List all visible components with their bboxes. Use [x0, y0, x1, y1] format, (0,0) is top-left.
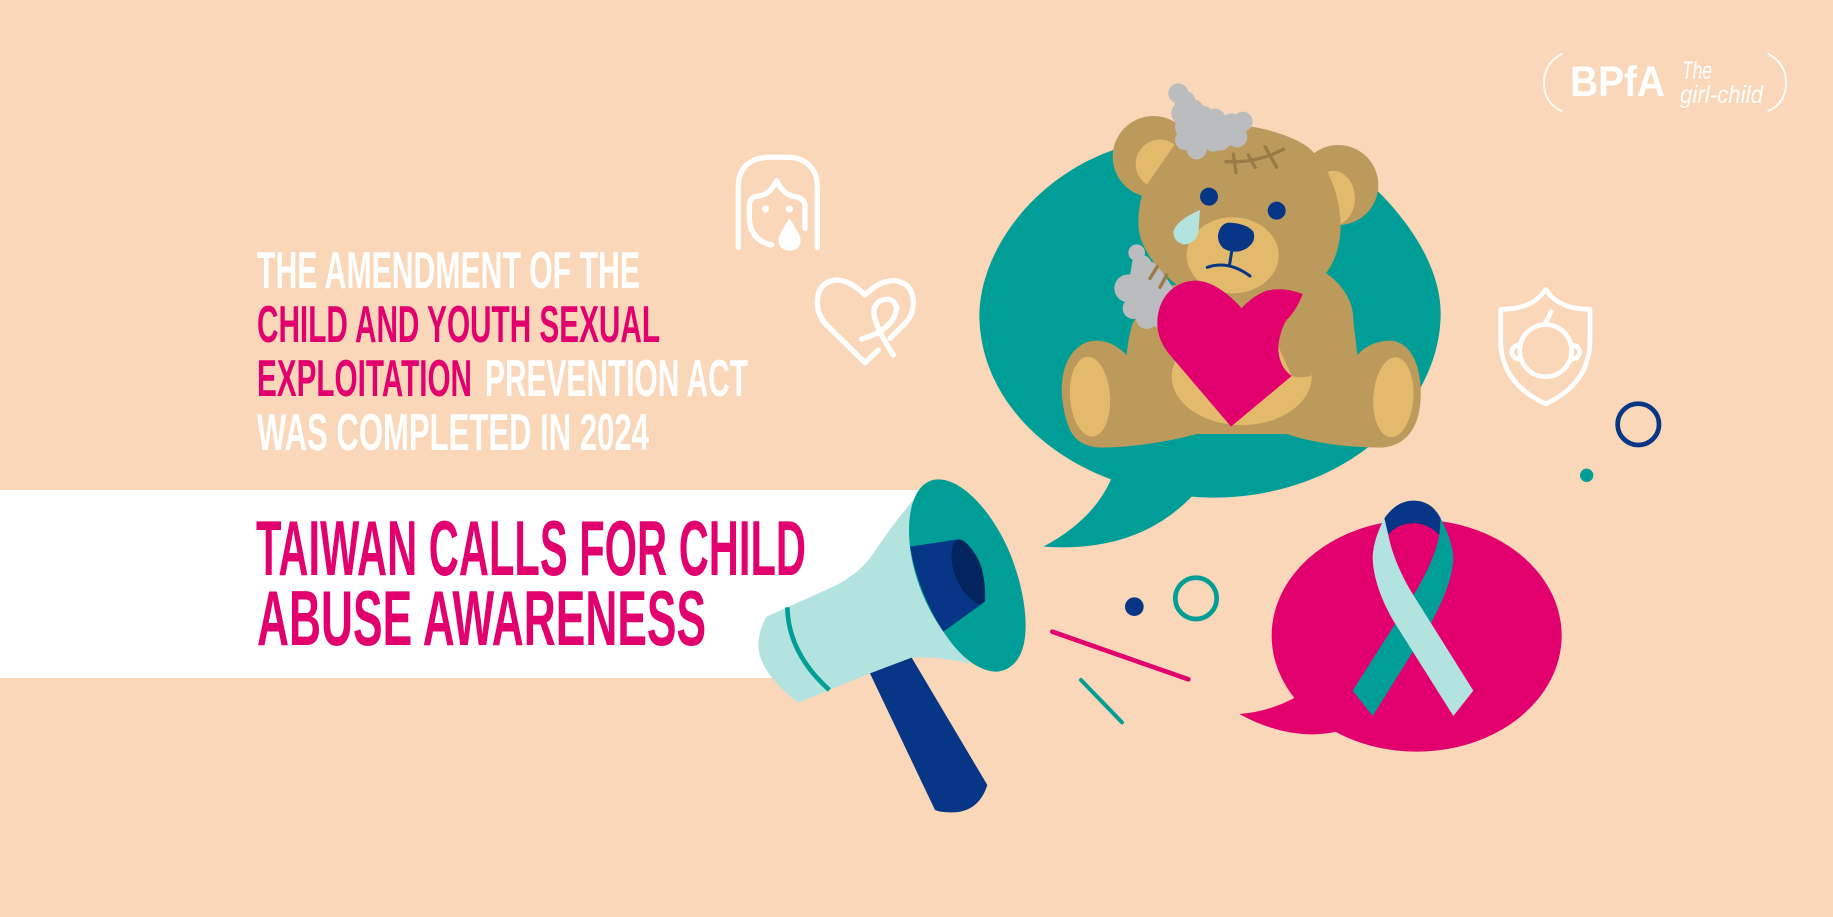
logo: BPfA The girl-child: girl-child: [1680, 81, 1764, 109]
logo: BPfA The girl-child: The: [1682, 57, 1712, 85]
icon: heart with ribbon: [817, 280, 913, 363]
main title: ABUSE AWARENESS: [257, 574, 706, 662]
logo: BPfA The girl-child: BPfA: [1570, 58, 1665, 106]
speech bubble: teal with teddy bear: [979, 83, 1441, 547]
intro text block: [257, 242, 748, 462]
main title: TAIWAN CALLS FOR CHILD: [256, 504, 806, 592]
decorative navy ring and teal dot: [1580, 404, 1659, 482]
heart held by bear: [1157, 281, 1303, 427]
intro text block: PREVENTION ACT: [485, 350, 748, 408]
sound lines and dots: [1052, 578, 1217, 722]
intro text block: THE AMENDMENT OF THE: [257, 242, 640, 300]
speech bubble: pink with awareness ribbon: [1239, 501, 1562, 752]
intro text block: CHILD AND YOUTH SEXUAL: [257, 296, 660, 354]
intro text block: WAS COMPLETED IN 2024: [257, 404, 649, 462]
megaphone: [758, 479, 1026, 812]
head patch and stitches: [1168, 83, 1283, 173]
bubble shape: [979, 146, 1441, 547]
teddy bear: [1062, 116, 1421, 448]
logo: BPfA The girl-child: [1544, 54, 1786, 111]
intro text block: EXPLOITATION: [257, 350, 472, 408]
main title: [256, 504, 806, 662]
awareness ribbon: [1353, 501, 1473, 716]
white title band: [0, 490, 925, 678]
icon: crying girl: [738, 157, 817, 251]
arm patch: [1114, 244, 1177, 329]
icon: shield with baby: [1501, 289, 1590, 404]
